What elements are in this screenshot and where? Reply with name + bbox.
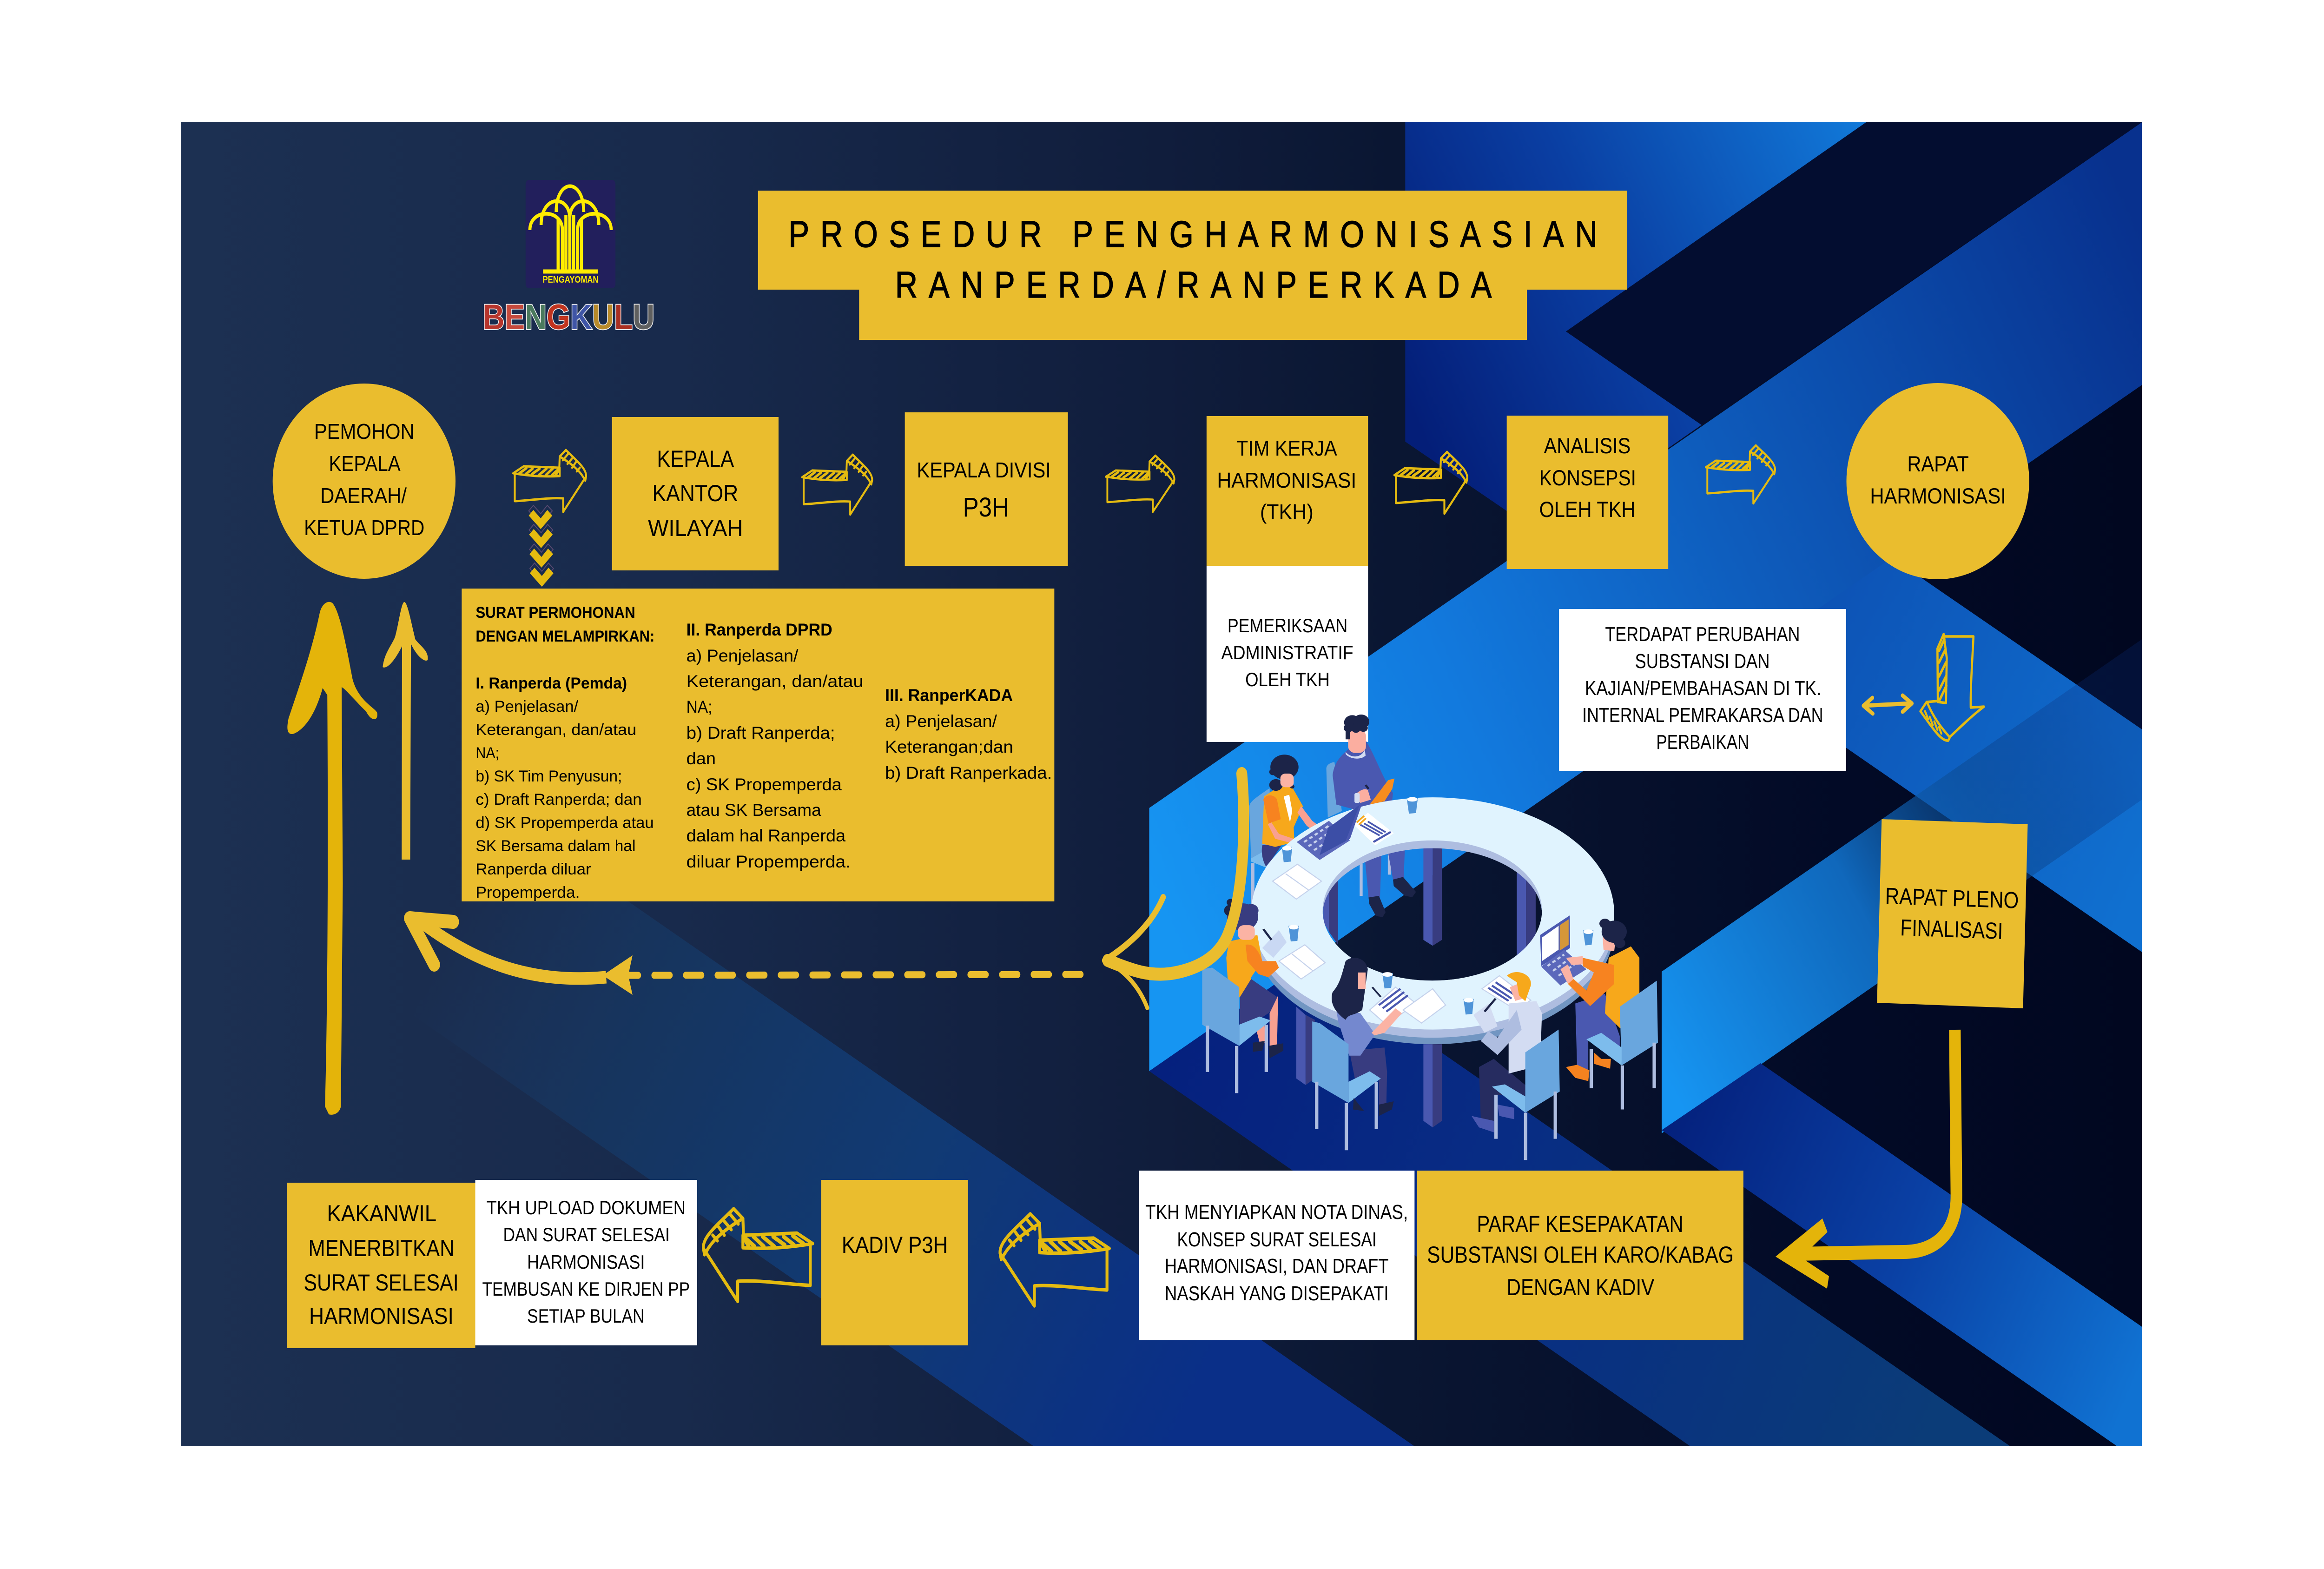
person: standing man [1327,715,1416,917]
column III: ranperkada: b) Draft Ranperkada. [885,763,1052,783]
step: kadiv p3h: KADIV P3H [842,1231,948,1258]
step: kepala kantor wilayah [612,417,779,570]
step: paraf kesepakatan: SUBSTANSI OLEH KARO/KABAG [1427,1241,1734,1268]
step: kakanwil menerbitkan [287,1183,475,1348]
arrow: pleno to paraf [1776,1030,1956,1289]
note: terdapat perubahan: KAJIAN/PEMBAHASAN DI TK. [1585,676,1821,700]
arrow: analisis to rapat harmonisasi [1706,445,1775,503]
step: pemohon circle [273,384,456,579]
column II: ranperda dprd: diluar Propemperda. [687,852,851,872]
step: rapat pleno finalisasi [1877,819,2027,1008]
note: tkh upload dokumen [475,1180,697,1345]
step: paraf kesepakatan: PARAF KESEPAKATAN [1477,1211,1684,1237]
column I: ranperda pemda: d) SK Propemperda atau [475,814,654,832]
note: tkh upload dokumen: DAN SURAT SELESAI [503,1224,670,1246]
arrow: small up [383,602,428,860]
column II: ranperda dprd: dalam hal Ranperda [687,826,845,846]
note: tkh menyiapkan nota dinas: TKH MENYIAPKAN NOTA DINAS, [1145,1200,1408,1224]
step: pemohon circle: PEMOHON [314,420,415,444]
column I: ranperda pemda: b) SK Tim Penyusun; [475,768,622,785]
logo: pengayoman emblem [526,180,615,288]
note: tkh menyiapkan nota dinas: NASKAH YANG DISEPAKATI [1165,1282,1389,1305]
step: tim kerja harmonisasi: (TKH) [1260,500,1314,524]
step: paraf kesepakatan: DENGAN KADIV [1507,1274,1654,1300]
column II: ranperda dprd [687,620,864,872]
step: kepala divisi p3h: KEPALA DIVISI [917,458,1051,482]
column I: ranperda pemda: a) Penjelasan/ [475,698,579,715]
step: pemohon circle: DAERAH/ [320,484,407,508]
step: rapat harmonisasi circle: HARMONISASI [1870,484,2006,509]
arrow: curved to pemohon [410,918,633,995]
step: kakanwil menerbitkan: HARMONISASI [309,1303,454,1329]
step: kepala divisi p3h [905,412,1068,566]
step: rapat pleno finalisasi: RAPAT PLENO [1885,882,2019,914]
column I: ranperda pemda: Keterangan, dan/atau [475,721,636,739]
person: woman with long hair [1312,958,1402,1150]
arrow: two-way [1863,695,1912,714]
note: tkh upload dokumen: SETIAP BULAN [527,1305,645,1327]
column III: ranperkada [885,686,1052,783]
person: blonde man [1472,972,1560,1160]
column I: ranperda pemda: Ranperda diluar [475,861,591,878]
column I: ranperda pemda: I. Ranperda (Pemda) [475,675,627,692]
column I: ranperda pemda [475,604,654,901]
step: paraf kesepakatan [1417,1171,1743,1340]
column III: ranperkada: Keterangan;dan [885,737,1013,757]
column III: ranperkada: III. RanperKADA [885,686,1013,705]
note: terdapat perubahan: INTERNAL PEMRAKARSA DAN [1582,703,1823,727]
note: tkh menyiapkan nota dinas: HARMONISASI, DAN DRAFT [1165,1254,1389,1278]
column I: ranperda pemda: NA; [475,744,499,762]
note: tkh upload dokumen: TEMBUSAN KE DIRJEN PP [482,1278,690,1300]
step: tim kerja harmonisasi [1207,416,1368,566]
step: kepala divisi p3h: P3H [963,493,1009,523]
arrow: curved brush from meeting [1105,774,1244,1008]
note: terdapat perubahan [1559,609,1846,771]
arrow: dashed line [629,974,1081,975]
step: analisis konsepsi [1507,416,1668,569]
person: right man with laptop [1540,915,1658,1110]
note: tkh menyiapkan nota dinas: KONSEP SURAT SELESAI [1177,1228,1377,1251]
arrow: kepala kantor to kepala divisi [802,455,872,515]
back table legs [1323,847,1536,958]
step: kakanwil menerbitkan: MENERBITKAN [308,1235,455,1261]
column II: ranperda dprd: II. Ranperda DPRD [687,620,832,640]
step: pemohon circle: KEPALA [329,452,401,476]
column II: ranperda dprd: atau SK Bersama [687,801,821,820]
step: analisis konsepsi: KONSEPSI [1539,466,1636,490]
column II: ranperda dprd: a) Penjelasan/ [687,646,799,666]
logo: pengayoman emblem: PENGAYOMAN [543,274,598,285]
note: tkh upload dokumen: TKH UPLOAD DOKUMEN [487,1197,686,1219]
person: woman with laptop chair and body [1249,755,1325,906]
column II: ranperda dprd: b) Draft Ranperda; [687,723,835,743]
logo: Bengkulu wordmark: BENGKULU [482,298,654,337]
column I: ranperda pemda: SURAT PERMOHONAN [475,604,635,622]
column I: ranperda pemda: DENGAN MELAMPIRKAN: [475,628,654,645]
step: rapat harmonisasi circle: RAPAT [1907,452,1969,477]
arrow: kepala divisi to tim kerja [1106,456,1175,512]
step: kadiv p3h [821,1180,968,1345]
column I: ranperda pemda: SK Bersama dalam hal [475,837,636,855]
column II: ranperda dprd: Keterangan, dan/atau [687,672,864,691]
arrow: to tkh upload [703,1209,812,1302]
person: woman lower left [1202,899,1287,1093]
step: kakanwil menerbitkan: KAKANWIL [327,1200,436,1226]
step: rapat pleno finalisasi: FINALISASI [1900,914,2003,944]
step: kepala kantor wilayah: WILAYAH [648,515,743,541]
step: analisis konsepsi: ANALISIS [1544,434,1631,458]
arrow: large up [287,602,377,1115]
chevrons down [529,505,554,587]
note: pemeriksaan administratif: OLEH TKH [1245,669,1330,691]
note: terdapat perubahan: SUBSTANSI DAN [1635,649,1770,673]
laptop left [1297,803,1362,860]
step: tim kerja harmonisasi: TIM KERJA [1236,437,1337,460]
step: pemohon circle: KETUA DPRD [304,516,424,540]
step: kepala kantor wilayah: KANTOR [652,480,738,506]
column III: ranperkada: a) Penjelasan/ [885,712,997,731]
arrow: pemohon to kepala kantor [513,450,586,512]
arrow: to kadiv [1000,1214,1109,1306]
column I: ranperda pemda: c) Draft Ranperda; dan [475,791,642,808]
illustration: meeting table [1202,715,1658,1160]
note: pemeriksaan administratif [1207,566,1368,742]
column II: ranperda dprd: NA; [687,697,712,717]
title banner: PROSEDUR PENGHARMONISASIAN [789,213,1598,255]
panel: surat permohonan requirements [462,589,1054,901]
arrow: down sketch [1921,634,1984,741]
front table legs [1296,1007,1442,1127]
note: terdapat perubahan: TERDAPAT PERUBAHAN [1605,622,1800,646]
step: analisis konsepsi: OLEH TKH [1539,498,1635,522]
note: tkh upload dokumen: HARMONISASI [527,1251,645,1273]
step: tim kerja harmonisasi: HARMONISASI [1217,469,1356,492]
note: terdapat perubahan: PERBAIKAN [1656,730,1749,754]
arrow: tim kerja to analisis [1394,452,1467,514]
column II: ranperda dprd: dan [687,749,716,768]
column I: ranperda pemda: Propemperda. [475,884,580,901]
note: pemeriksaan administratif: ADMINISTRATIF [1221,642,1353,664]
note: pemeriksaan administratif: PEMERIKSAAN [1228,615,1347,637]
table top ring [1251,797,1614,1044]
step: rapat harmonisasi circle [1846,383,2029,579]
step: kepala kantor wilayah: KEPALA [657,445,734,472]
title banner [758,191,1627,340]
table items [1273,797,1593,1025]
step: kakanwil menerbitkan: SURAT SELESAI [304,1269,459,1296]
background panel [181,122,2142,1446]
note: tkh menyiapkan nota dinas [1139,1171,1414,1340]
column II: ranperda dprd: c) SK Propemperda [687,775,842,794]
title banner: RANPERDA/RANPERKADA [895,264,1492,305]
